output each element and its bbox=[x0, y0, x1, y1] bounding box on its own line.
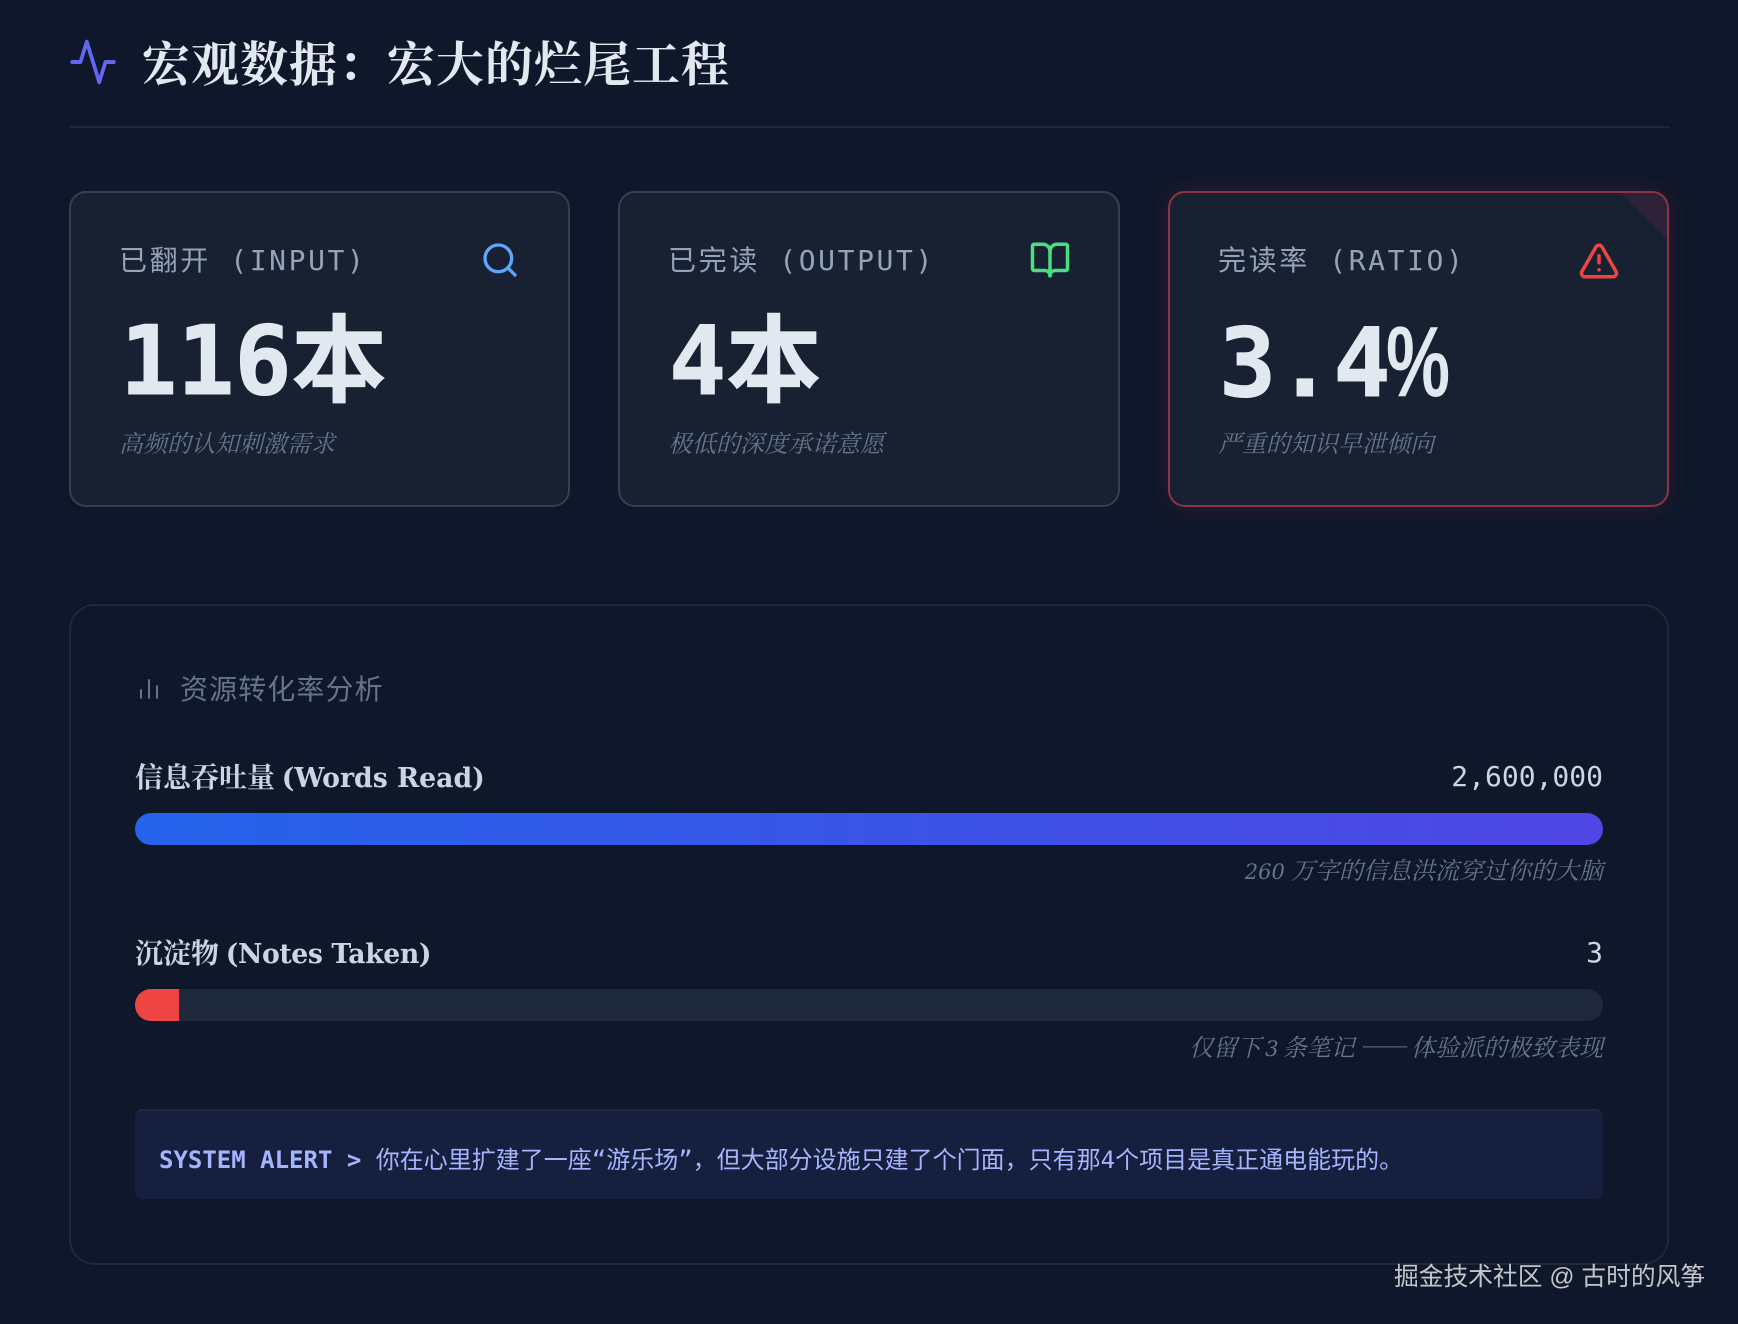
title: 宏观数据：宏大的烂尾工程 bbox=[142, 26, 730, 95]
card label: 已完读 (OUTPUT) bbox=[668, 244, 935, 277]
card label: 已翻开 (INPUT) bbox=[119, 244, 366, 277]
header bbox=[69, 30, 1669, 128]
panel: ratio card bbox=[1168, 191, 1669, 507]
icon: search bbox=[483, 243, 517, 277]
panel: input card bbox=[69, 191, 570, 507]
icon: open book bbox=[1030, 242, 1070, 278]
alert text: SYSTEM ALERT > 你在心里扩建了一座“游乐场”，但大部分设施只建了个门面，只有那4个项目是真正通电能玩的。 bbox=[159, 1146, 1403, 1174]
card note: 高频的认知刺激需求 bbox=[119, 424, 335, 459]
words read label: 信息吞吐量 (Words Read) bbox=[135, 761, 485, 794]
big number: 4本 bbox=[669, 307, 821, 417]
notes taken value: 3 bbox=[1586, 936, 1603, 969]
words read bar bbox=[135, 813, 1603, 845]
panel: output card bbox=[618, 191, 1120, 507]
big number: % bbox=[1386, 306, 1450, 418]
icon: bar chart bbox=[140, 679, 158, 699]
watermark: 掘金技术社区 @ 古时的风筝 bbox=[1394, 1264, 1705, 1291]
corner accent bbox=[1621, 193, 1667, 239]
card label: 完读率 (RATIO) bbox=[1218, 244, 1465, 277]
words read value: 2,600,000 bbox=[1451, 760, 1603, 793]
notes taken bar bbox=[135, 989, 1603, 1021]
icon: warning triangle bbox=[1580, 244, 1618, 278]
words read caption: 260 万字的信息洪流穿过你的大脑 bbox=[1245, 851, 1603, 886]
system alert callout bbox=[135, 1109, 1603, 1199]
icon: activity pulse bbox=[70, 40, 116, 84]
big number: 3.4 bbox=[1219, 309, 1391, 419]
card note: 极低的深度承诺意愿 bbox=[668, 424, 884, 459]
notes taken caption: 仅留下 3 条笔记 —— 体验派的极致表现 bbox=[1189, 1028, 1603, 1063]
panel frame bbox=[69, 604, 1669, 1265]
big number: 116本 bbox=[120, 307, 387, 417]
card note: 严重的知识早泄倾向 bbox=[1218, 424, 1434, 459]
notes taken label: 沉淀物 (Notes Taken) bbox=[135, 937, 431, 970]
section heading: 资源转化率分析 bbox=[180, 674, 384, 705]
notes taken fill bbox=[135, 989, 179, 1021]
